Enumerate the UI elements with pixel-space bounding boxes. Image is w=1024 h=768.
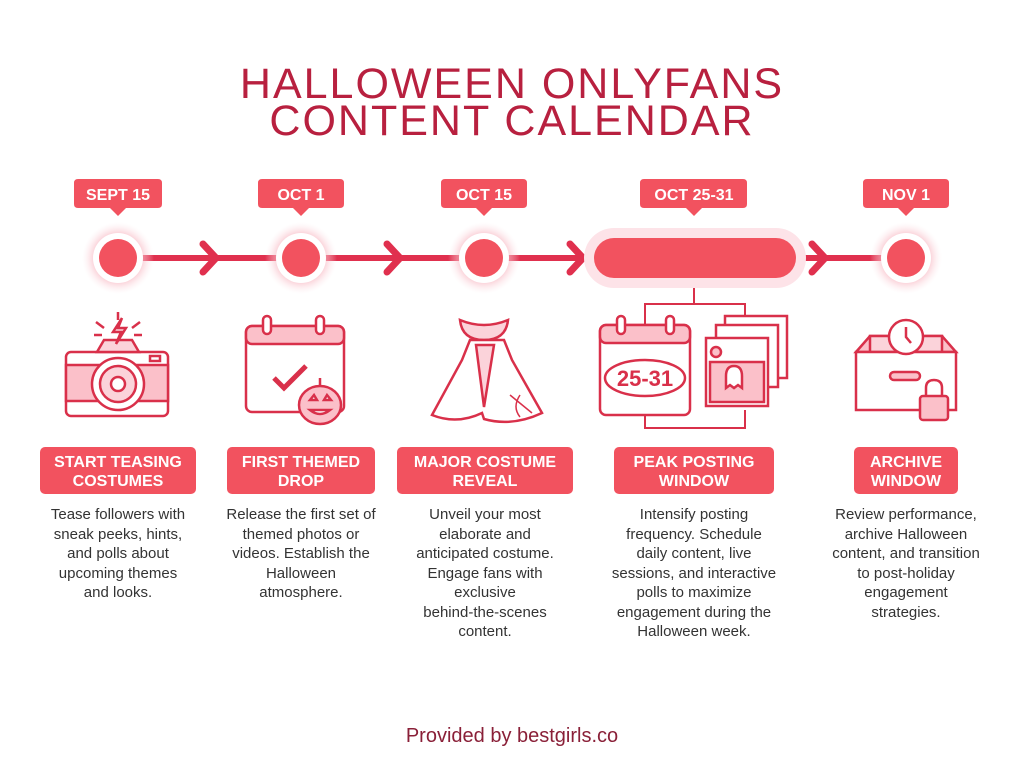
- icon: calendar with pumpkin: [246, 316, 344, 424]
- icon: archive box: [856, 320, 956, 420]
- title: HALLOWEEN ONLYFANS: [240, 60, 784, 108]
- descriptions: atmosphere.: [259, 584, 343, 601]
- date labels: SEPT 15: [86, 187, 150, 204]
- descriptions: videos. Establish the: [232, 545, 370, 562]
- icon: mask and cape: [432, 320, 542, 422]
- descriptions: anticipated costume.: [416, 545, 554, 562]
- descriptions: engagement: [864, 584, 949, 601]
- descriptions: and looks.: [84, 584, 152, 601]
- descriptions: Intensify posting: [640, 506, 748, 523]
- descriptions: Halloween: [266, 565, 336, 582]
- descriptions: polls to maximize: [636, 584, 752, 601]
- step titles: WINDOW: [871, 473, 942, 490]
- descriptions: exclusive: [454, 584, 516, 601]
- title: [240, 60, 784, 145]
- date labels: OCT 25-31: [654, 187, 734, 204]
- icon: camera: [66, 312, 168, 416]
- descriptions: frequency. Schedule: [626, 526, 762, 543]
- date labels: OCT 15: [456, 187, 512, 204]
- title: CONTENT CALENDAR: [269, 97, 755, 145]
- descriptions: sneak peeks, hints,: [54, 526, 182, 543]
- step titles: START TEASING: [54, 454, 182, 471]
- date labels: OCT 1: [277, 187, 325, 204]
- descriptions: Engage fans with: [427, 565, 543, 582]
- step titles: FIRST THEMED: [242, 454, 360, 471]
- step titles: ARCHIVE: [870, 454, 942, 471]
- descriptions: behind-the-scenes: [423, 604, 547, 621]
- descriptions: and polls about: [67, 545, 170, 562]
- date labels: [74, 179, 949, 216]
- descriptions: content.: [458, 623, 512, 640]
- icon: connectors and calendar/posts: [600, 288, 787, 428]
- descriptions: daily content, live: [636, 545, 752, 562]
- descriptions: Release the first set of: [226, 506, 376, 523]
- descriptions: engagement during the: [617, 604, 771, 621]
- descriptions: elaborate and: [439, 526, 531, 543]
- milestone markers: [82, 222, 942, 294]
- descriptions: Unveil your most: [429, 506, 542, 523]
- step titles: DROP: [278, 473, 324, 490]
- descriptions: [51, 506, 980, 640]
- date labels: NOV 1: [882, 187, 930, 204]
- step titles: COSTUMES: [73, 473, 164, 490]
- step titles: MAJOR COSTUME: [414, 454, 556, 471]
- descriptions: themed photos or: [243, 526, 359, 543]
- step titles: [40, 447, 958, 494]
- step titles: PEAK POSTING: [634, 454, 754, 471]
- step titles: REVEAL: [453, 473, 518, 490]
- descriptions: archive Halloween: [845, 526, 967, 543]
- step titles: WINDOW: [659, 473, 730, 490]
- footer: Provided by bestgirls.co: [406, 725, 618, 747]
- descriptions: sessions, and interactive: [612, 565, 776, 582]
- descriptions: to post-holiday: [857, 565, 955, 582]
- descriptions: upcoming themes: [59, 565, 177, 582]
- descriptions: strategies.: [871, 604, 941, 621]
- timeline line: [118, 244, 906, 272]
- descriptions: content, and transition: [832, 545, 980, 562]
- descriptions: Review performance,: [835, 506, 977, 523]
- descriptions: Tease followers with: [51, 506, 185, 523]
- descriptions: Halloween week.: [637, 623, 751, 640]
- icon: connectors and calendar/posts: 25-31: [617, 366, 673, 391]
